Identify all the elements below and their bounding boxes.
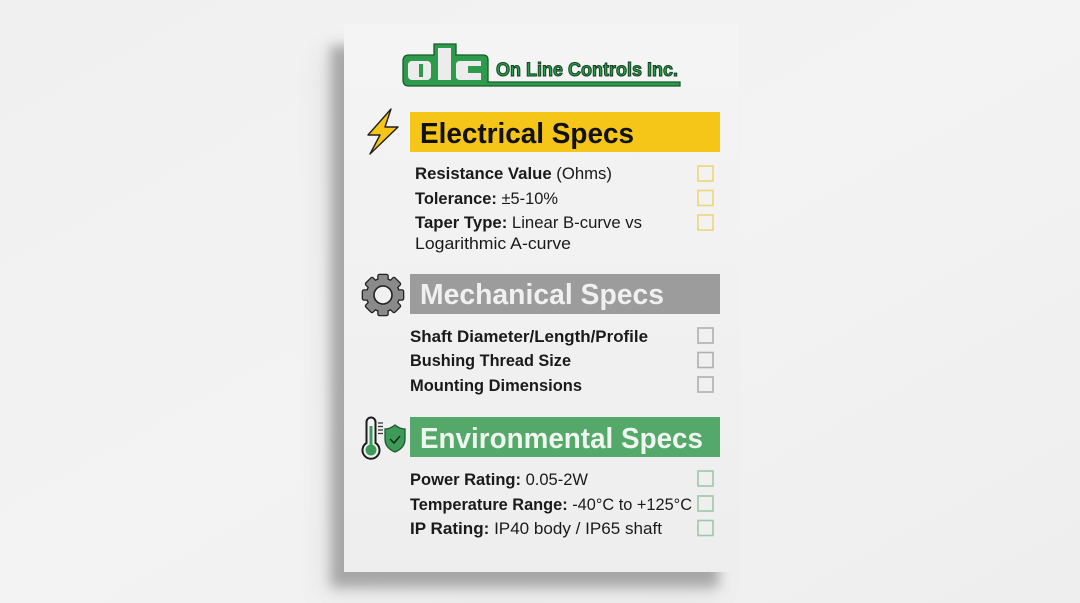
list: electrical items: Resistance Value (Ohms) (415, 164, 612, 183)
list: environmental items (410, 470, 692, 538)
heading: Electrical Specs (410, 112, 720, 152)
list: environmental items: Temperature Range: -40°C to +125°C (410, 495, 692, 514)
list: mechanical items: Bushing Thread Size (410, 351, 571, 370)
checkboxes: electrical (698, 166, 713, 230)
checkboxes: environmental (698, 471, 713, 536)
checkboxes: mechanical (698, 328, 713, 392)
heading: Environmental Specs: Environmental Specs (420, 423, 703, 455)
icon: lightning bolt (368, 109, 398, 154)
heading: Mechanical Specs: Mechanical Specs (420, 279, 664, 311)
heading: Mechanical Specs (410, 274, 720, 314)
list: mechanical items (410, 327, 648, 395)
list: electrical items: Logarithmic A-curve (415, 234, 571, 253)
panel: spec sheet (344, 24, 738, 572)
list: electrical items: Tolerance: ±5-10% (415, 189, 558, 208)
icon: gear (363, 275, 403, 315)
list: mechanical items: Mounting Dimensions (410, 376, 582, 395)
list: mechanical items: Shaft Diameter/Length/Profile (410, 327, 648, 346)
icon: thermometer and shield (362, 418, 405, 459)
list: environmental items: IP Rating: IP40 body / IP65 shaft (410, 519, 662, 538)
list: electrical items: Taper Type: Linear B-curve vs (415, 213, 642, 232)
list: environmental items: Power Rating: 0.05-2W (410, 470, 588, 489)
logo: On Line Controls: On Line Controls Inc. (496, 60, 678, 81)
logo: On Line Controls (403, 44, 680, 86)
list: electrical items (415, 164, 642, 253)
paper drop shadow (320, 46, 720, 597)
heading: Electrical Specs: Electrical Specs (420, 118, 634, 150)
